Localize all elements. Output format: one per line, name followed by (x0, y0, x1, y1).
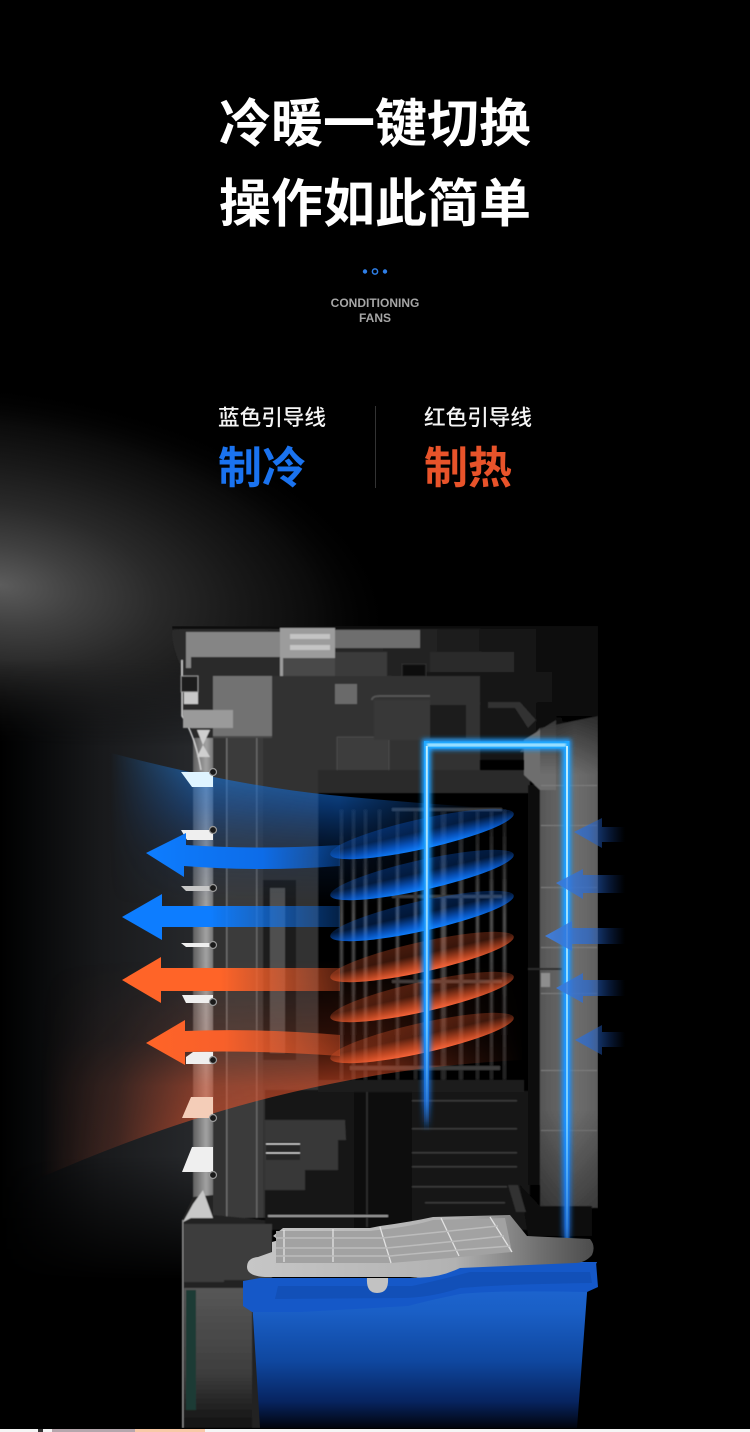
subtitle: CONDITIONING (331, 296, 419, 310)
airflow wedge: blue (116, 754, 468, 892)
subtitle (331, 296, 419, 325)
title (219, 96, 531, 234)
motor (265, 1120, 346, 1190)
fan chamber (318, 793, 528, 1091)
legend: blue line cooling: 蓝色引导线 (218, 405, 326, 430)
water tank (243, 1262, 598, 1428)
machine body (172, 626, 598, 1428)
lower chamber (265, 1090, 530, 1230)
legend: blue line cooling: 制冷 (218, 444, 306, 493)
lower left connector block (220, 1224, 272, 1280)
blue outflow arrow 1 (146, 833, 340, 877)
legend: red line heating (424, 405, 532, 493)
airflow wedge: red (55, 976, 512, 1171)
title: 冷暖一键切换 (219, 96, 531, 154)
legend divider (374, 406, 376, 488)
red outflow arrow 3 (122, 957, 340, 1003)
intake arrow 1 (574, 818, 625, 848)
main dark mid panel (213, 738, 318, 1218)
vent slats (181, 768, 216, 1178)
intake arrow 4 (556, 973, 625, 1003)
legend: red line heating: 红色引导线 (424, 405, 532, 430)
blue outflow arrow 2 (122, 894, 340, 940)
left column (193, 738, 215, 1208)
intake arrow 2 (556, 869, 625, 899)
upper mid shell (213, 676, 335, 772)
glowing guide frame (422, 739, 571, 1269)
fan airflow bands: blue cooling, red heating (327, 799, 517, 1073)
title: 操作如此简单 (219, 176, 531, 234)
intake arrow 5 (575, 1025, 625, 1055)
intake arrow 3 (545, 921, 625, 951)
legend: red line heating: 制热 (424, 444, 512, 493)
lower left housing (182, 1195, 265, 1428)
product illustration (0, 418, 750, 1432)
background light beam (0, 418, 329, 1254)
top shell (172, 626, 598, 760)
red outflow arrow 4 (146, 1020, 340, 1065)
right side panel (528, 785, 540, 1185)
subtitle: FANS (359, 311, 391, 325)
removable filter tray (247, 1215, 594, 1293)
legend: blue line cooling (218, 405, 326, 493)
bottom edge strip (0, 1429, 750, 1432)
